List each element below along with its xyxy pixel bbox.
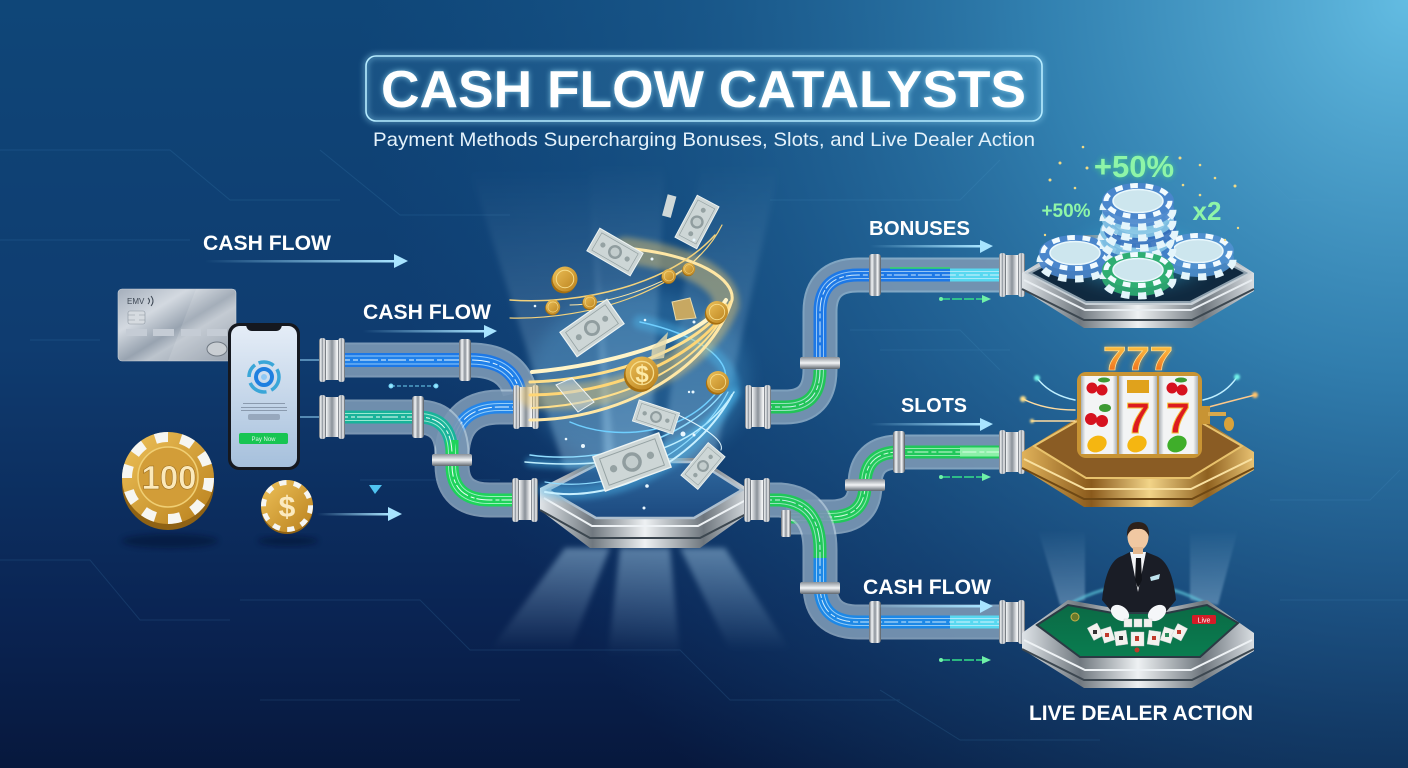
bonus text: +50%	[1094, 149, 1174, 184]
pipe: to slots	[786, 452, 1012, 517]
pipe flanges	[319, 253, 1025, 644]
title banner	[366, 56, 1042, 121]
bonus text	[1041, 149, 1221, 226]
gold chip 100	[122, 432, 218, 548]
777 sign: 777	[1103, 340, 1173, 377]
dashed indicator between pipes	[389, 384, 438, 388]
chips and live badge	[1071, 613, 1079, 621]
sevens: 7	[1126, 394, 1150, 443]
unlabelled flow arrow	[317, 485, 402, 521]
cash flow label 2 with arrow	[363, 301, 497, 338]
bonus text: +50%	[1041, 201, 1091, 222]
pay button	[239, 433, 288, 444]
green flow arrow: slots	[939, 473, 991, 481]
green flow arrow: live dealer	[939, 656, 991, 664]
banknotes	[556, 194, 725, 491]
cargo label: slots: SLOTS	[901, 395, 967, 417]
sevens: 7	[1166, 394, 1190, 443]
small side clamp	[781, 510, 791, 537]
dealer	[1102, 522, 1176, 624]
platform: live dealer: Live	[1198, 618, 1211, 624]
chip stack	[1039, 183, 1234, 296]
gold chip 100: 100	[141, 459, 197, 496]
credit card	[118, 289, 236, 361]
gold swirl	[510, 225, 732, 420]
blue swirl	[525, 322, 734, 494]
label: live dealer action: LIVE DEALER ACTION	[1029, 702, 1253, 725]
cargo label: cash flow to dealer: CASH FLOW	[863, 576, 991, 599]
cash flow label 1 with arrow	[203, 232, 408, 268]
gold coins	[545, 263, 729, 395]
bonus text: +50%	[1094, 149, 1174, 184]
bell	[1127, 380, 1149, 393]
gold coins: $	[635, 361, 649, 388]
platform: bonuses	[1022, 146, 1254, 328]
cash flow label 2 with arrow: CASH FLOW	[363, 301, 491, 324]
light rays	[1023, 377, 1255, 421]
platform: slots	[1020, 340, 1258, 507]
connector lines from phone	[300, 359, 330, 418]
app logo	[249, 362, 279, 392]
sevens	[1126, 394, 1190, 443]
slot machine	[1077, 372, 1202, 458]
lemons and lime	[1085, 433, 1109, 455]
gold chip dollar	[258, 480, 318, 546]
playing cards	[1087, 619, 1188, 646]
cargo label: bonuses	[869, 218, 993, 253]
title: CASH FLOW CATALYSTS	[381, 61, 1026, 119]
pipe: second input crossing	[332, 407, 526, 500]
gold chip dollar: $	[279, 491, 296, 524]
hologram beams	[1038, 530, 1238, 605]
cargo label: cash flow to dealer	[863, 576, 993, 613]
central hub platform	[540, 458, 750, 548]
bonus text: x2	[1193, 196, 1221, 226]
pipe: to bonuses	[758, 268, 1012, 407]
hub flanges	[512, 478, 770, 522]
light beams around vortex	[470, 165, 790, 655]
subtitle: Payment Methods Supercharging Bonuses, Slots, and Live Dealer Action	[373, 129, 1035, 151]
cargo label: slots	[870, 395, 993, 431]
money vortex	[510, 194, 734, 509]
handle	[1200, 406, 1234, 431]
credit card: EMV	[127, 297, 145, 306]
777 sign: 777	[1103, 340, 1173, 377]
pay button: Pay Now	[251, 437, 276, 443]
cherries	[1085, 382, 1188, 427]
pipe: top input	[332, 360, 520, 392]
sparkles	[534, 238, 696, 510]
smartphone	[228, 323, 300, 470]
bonus sparkles	[1044, 146, 1239, 241]
cargo label: bonuses: BONUSES	[869, 218, 970, 240]
platform: live dealer	[1022, 522, 1254, 688]
title: CASH FLOW CATALYSTS	[381, 61, 1026, 119]
green flow arrow: bonuses	[939, 295, 991, 303]
cash flow label 1 with arrow: CASH FLOW	[203, 232, 331, 255]
pipe: to live dealer	[758, 500, 1012, 622]
